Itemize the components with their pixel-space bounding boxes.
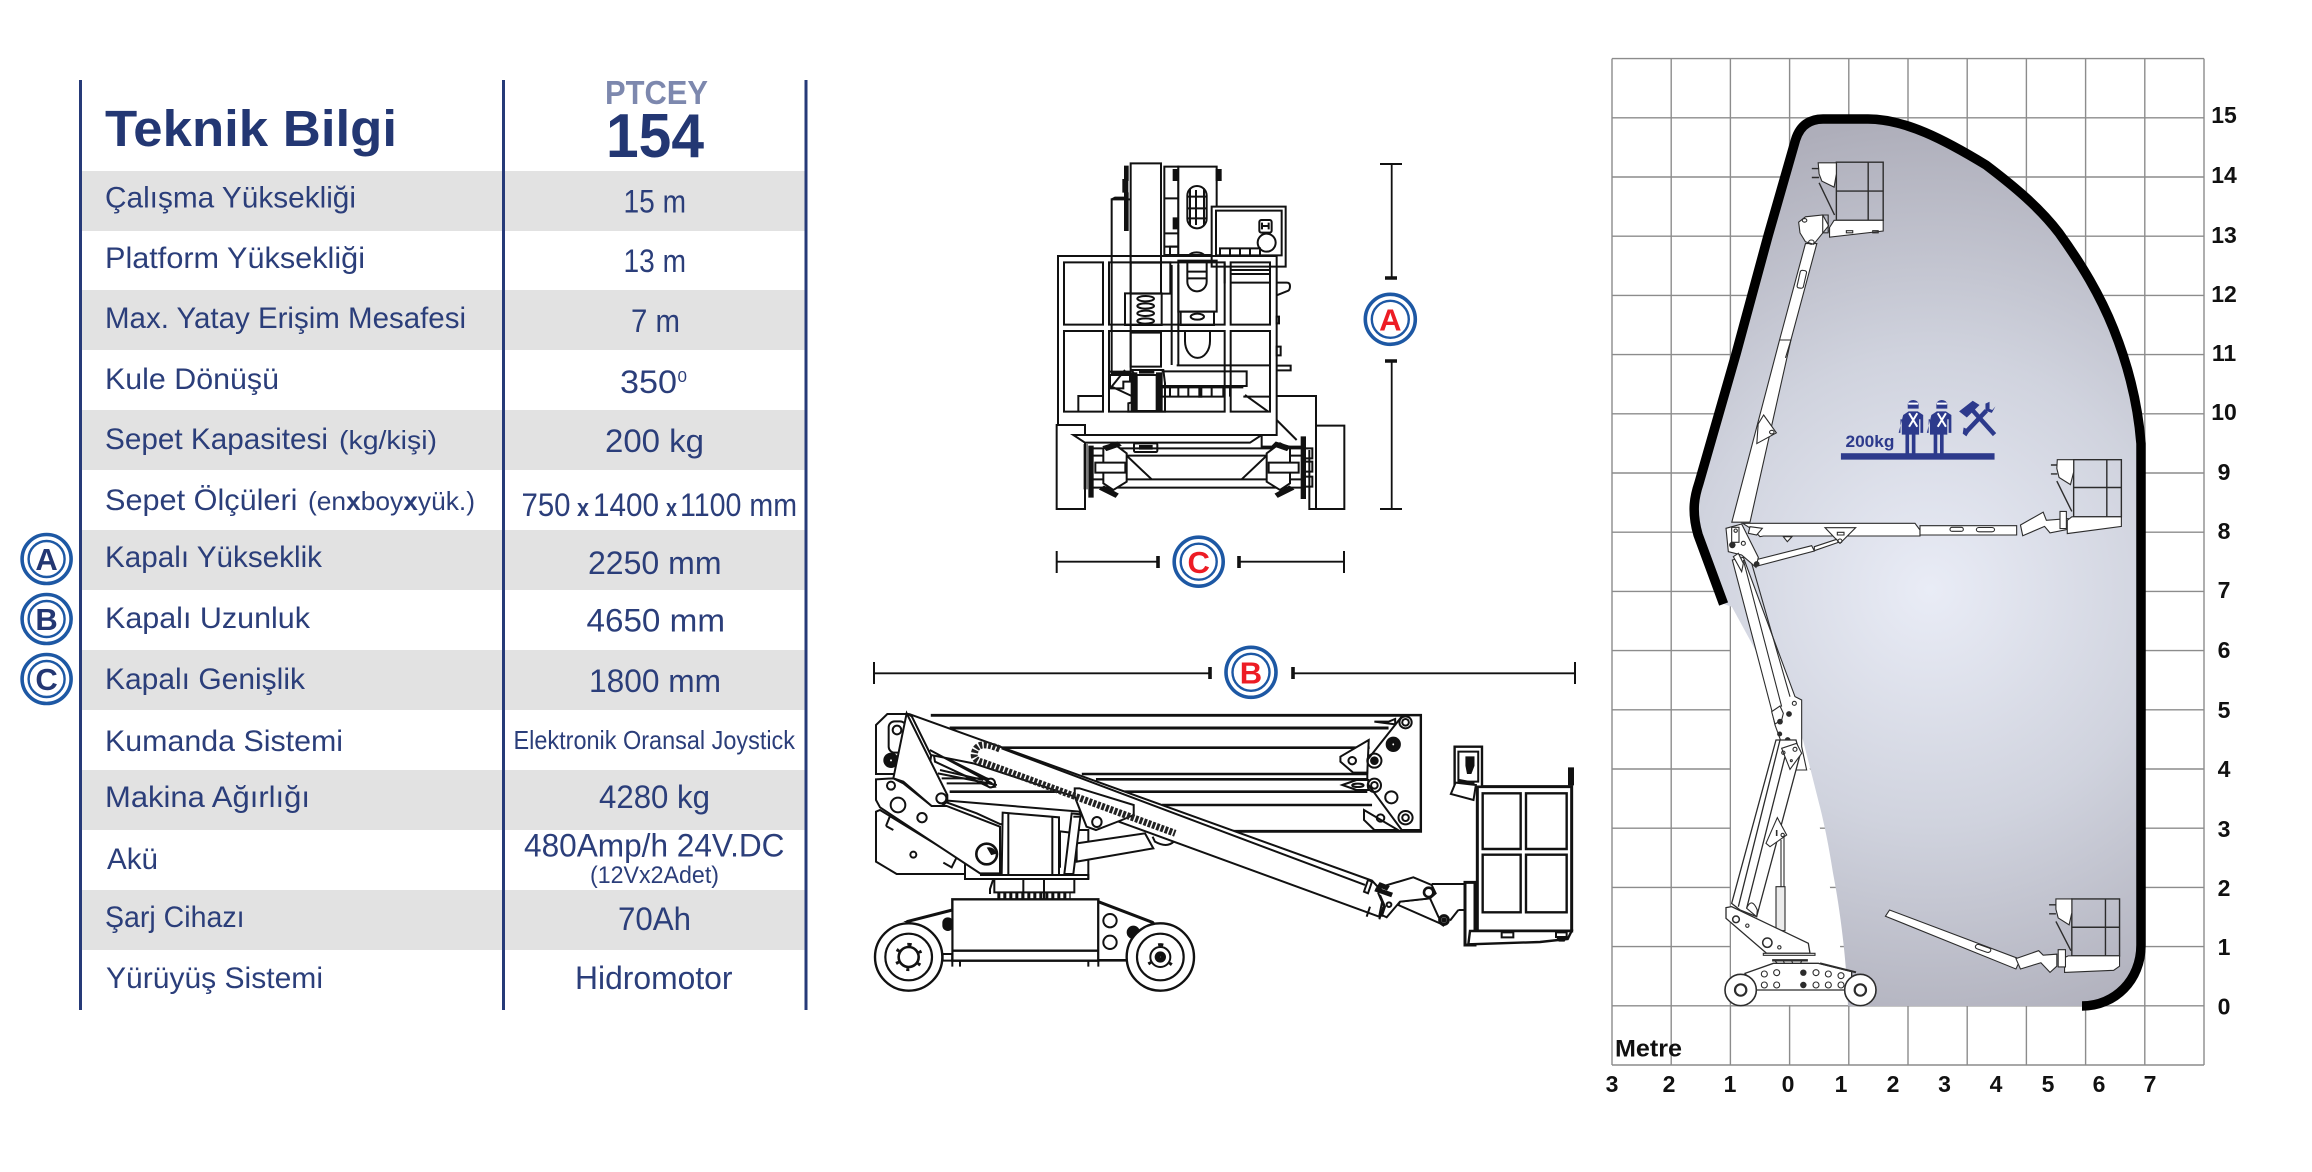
row labels: Kapalı Yükseklik: [105, 541, 323, 574]
x axis labels: 6: [2093, 1071, 2105, 1097]
row labels: Max. Yatay Erişim Mesafesi: [105, 302, 466, 335]
icon: capacity, workers and tools: 200kg: [1845, 432, 1894, 451]
dimension C with badge: [1057, 537, 1344, 586]
row labels: Yürüyüş Sistemi: [106, 962, 323, 995]
horizontal reach jib and basket: [1976, 460, 2121, 536]
lower boom and machine base: [1725, 740, 1876, 1006]
chassis and wheels: [1057, 396, 1344, 509]
stowed boom position and basket: [1885, 899, 2120, 972]
badge B: B: [35, 602, 58, 637]
boom position: horizontal reach: [1726, 523, 2017, 770]
row labels: (kg/kişi): [339, 425, 437, 455]
upper boom, chain and jib: [911, 715, 1384, 917]
row labels: Sepet Ölçüleri: [105, 484, 298, 517]
y axis labels: 8: [2218, 518, 2231, 544]
icon: capacity, workers and tools: [1841, 400, 1995, 460]
badge A: [22, 534, 71, 584]
dimension B with badge: B: [1240, 656, 1262, 690]
row labels: Sepet Kapasitesi: [105, 423, 328, 456]
y axis labels: 14: [2211, 162, 2237, 188]
x axis labels: 2: [1663, 1071, 1675, 1097]
row labels: Şarj Cihazı: [105, 901, 244, 934]
row labels: Makina Ağırlığı: [105, 781, 310, 814]
row values: (12Vx2Adet): [590, 862, 719, 889]
row labels: Kapalı Genişlik: [105, 663, 306, 696]
panel: technical specification table: [79, 74, 808, 1010]
x axis labels: 3: [1938, 1071, 1951, 1097]
y axis labels: 7: [2218, 577, 2230, 603]
y axis labels: 2: [2218, 875, 2230, 901]
y axis labels: 10: [2211, 399, 2237, 425]
row values: Elektronik Oransal Joystick: [514, 725, 796, 755]
row labels: Akü: [107, 843, 158, 876]
y axis labels: 9: [2218, 459, 2230, 485]
row labels: [105, 182, 475, 995]
y axis labels: 3: [2218, 816, 2230, 842]
y axis labels: [2211, 102, 2237, 1020]
rear boom arms: [931, 715, 1421, 831]
y axis labels: 4: [2218, 756, 2231, 782]
badge C: [22, 654, 71, 704]
row values: 0: [678, 369, 687, 386]
reach envelope outline: [1694, 119, 2141, 1006]
dimension B with badge: [874, 647, 1575, 697]
y axis labels: 11: [2212, 340, 2236, 366]
y axis labels: 6: [2218, 637, 2230, 663]
x axis labels: 4: [1990, 1071, 2003, 1097]
row values: 13 m: [624, 243, 686, 279]
badge B: [22, 594, 71, 644]
x axis labels: 1: [1724, 1071, 1737, 1097]
y axis labels: 15: [2211, 102, 2237, 128]
x axis labels: 3: [1606, 1071, 1618, 1097]
badge A: A: [35, 542, 58, 577]
row values: 15 m: [624, 184, 686, 220]
row values: 4280 kg: [599, 779, 710, 815]
legend badges A B C: [22, 534, 71, 704]
row values: 480Amp/h 24V.DC: [524, 828, 784, 864]
row values: 750: [522, 487, 570, 523]
machine seen through the basket: [1078, 252, 1270, 412]
row labels: Platform Yüksekliği: [105, 242, 365, 275]
model name: PTCEY: [605, 74, 708, 111]
heading: Teknik Bilgi: Teknik Bilgi: [105, 100, 397, 157]
basket frame: [1058, 256, 1291, 435]
row values: 70Ah: [618, 901, 691, 937]
row labels: Kule Dönüşü: [105, 363, 279, 396]
table column rules: [79, 80, 808, 1010]
row values: 4650 mm: [586, 602, 725, 638]
row values: x: [577, 495, 590, 522]
row values: 200 kg: [605, 423, 704, 459]
row values: 350: [620, 364, 677, 400]
x axis labels: [1606, 1071, 2156, 1097]
lower arm and turret: [875, 713, 1194, 991]
white wedge below envelope: [1731, 592, 1850, 1005]
y axis labels: 0: [2218, 994, 2230, 1020]
boom position: top basket: [1732, 162, 1883, 522]
table row stripes: [82, 171, 806, 950]
jib and platform basket: [1364, 768, 1573, 945]
row values: 1800 mm: [589, 663, 721, 699]
x axis labels: 0: [1782, 1071, 1794, 1097]
row values: [514, 184, 797, 996]
y axis labels: 13: [2211, 222, 2237, 248]
row labels: (enxboyxyük.): [308, 486, 475, 516]
axis unit label: Metre: [1615, 1036, 1682, 1062]
row values: 1100 mm: [680, 487, 797, 523]
x axis labels: 5: [2042, 1071, 2055, 1097]
x axis labels: 2: [1887, 1071, 1899, 1097]
y axis labels: 5: [2218, 697, 2231, 723]
row values: x: [666, 495, 678, 522]
dimension C with badge: C: [1188, 545, 1210, 580]
front view drawing of the lift: [1057, 163, 1344, 509]
x axis labels: 1: [1835, 1071, 1848, 1097]
row labels: Kapalı Uzunluk: [105, 602, 311, 635]
badge C: C: [35, 662, 58, 697]
row values: 1400: [593, 487, 659, 523]
dimension A with badge: [1365, 164, 1415, 509]
panel: working range chart: [1606, 59, 2237, 1097]
row labels: Kumanda Sistemi: [105, 725, 343, 758]
reach envelope fill: [1694, 119, 2141, 1006]
y axis labels: 12: [2211, 281, 2237, 307]
row values: Hidromotor: [575, 960, 733, 996]
side view drawing of the lift: [875, 713, 1573, 991]
row values: 2250 mm: [588, 545, 722, 581]
model number: 154: [606, 102, 704, 171]
joystick control box: [1451, 747, 1482, 800]
dimension A with badge: A: [1379, 302, 1401, 338]
y axis labels: 1: [2218, 934, 2231, 960]
row labels: Çalışma Yüksekliği: [105, 182, 356, 214]
x axis labels: 7: [2144, 1071, 2156, 1097]
row values: 7 m: [631, 303, 680, 339]
chart grid: [1612, 59, 2204, 1065]
